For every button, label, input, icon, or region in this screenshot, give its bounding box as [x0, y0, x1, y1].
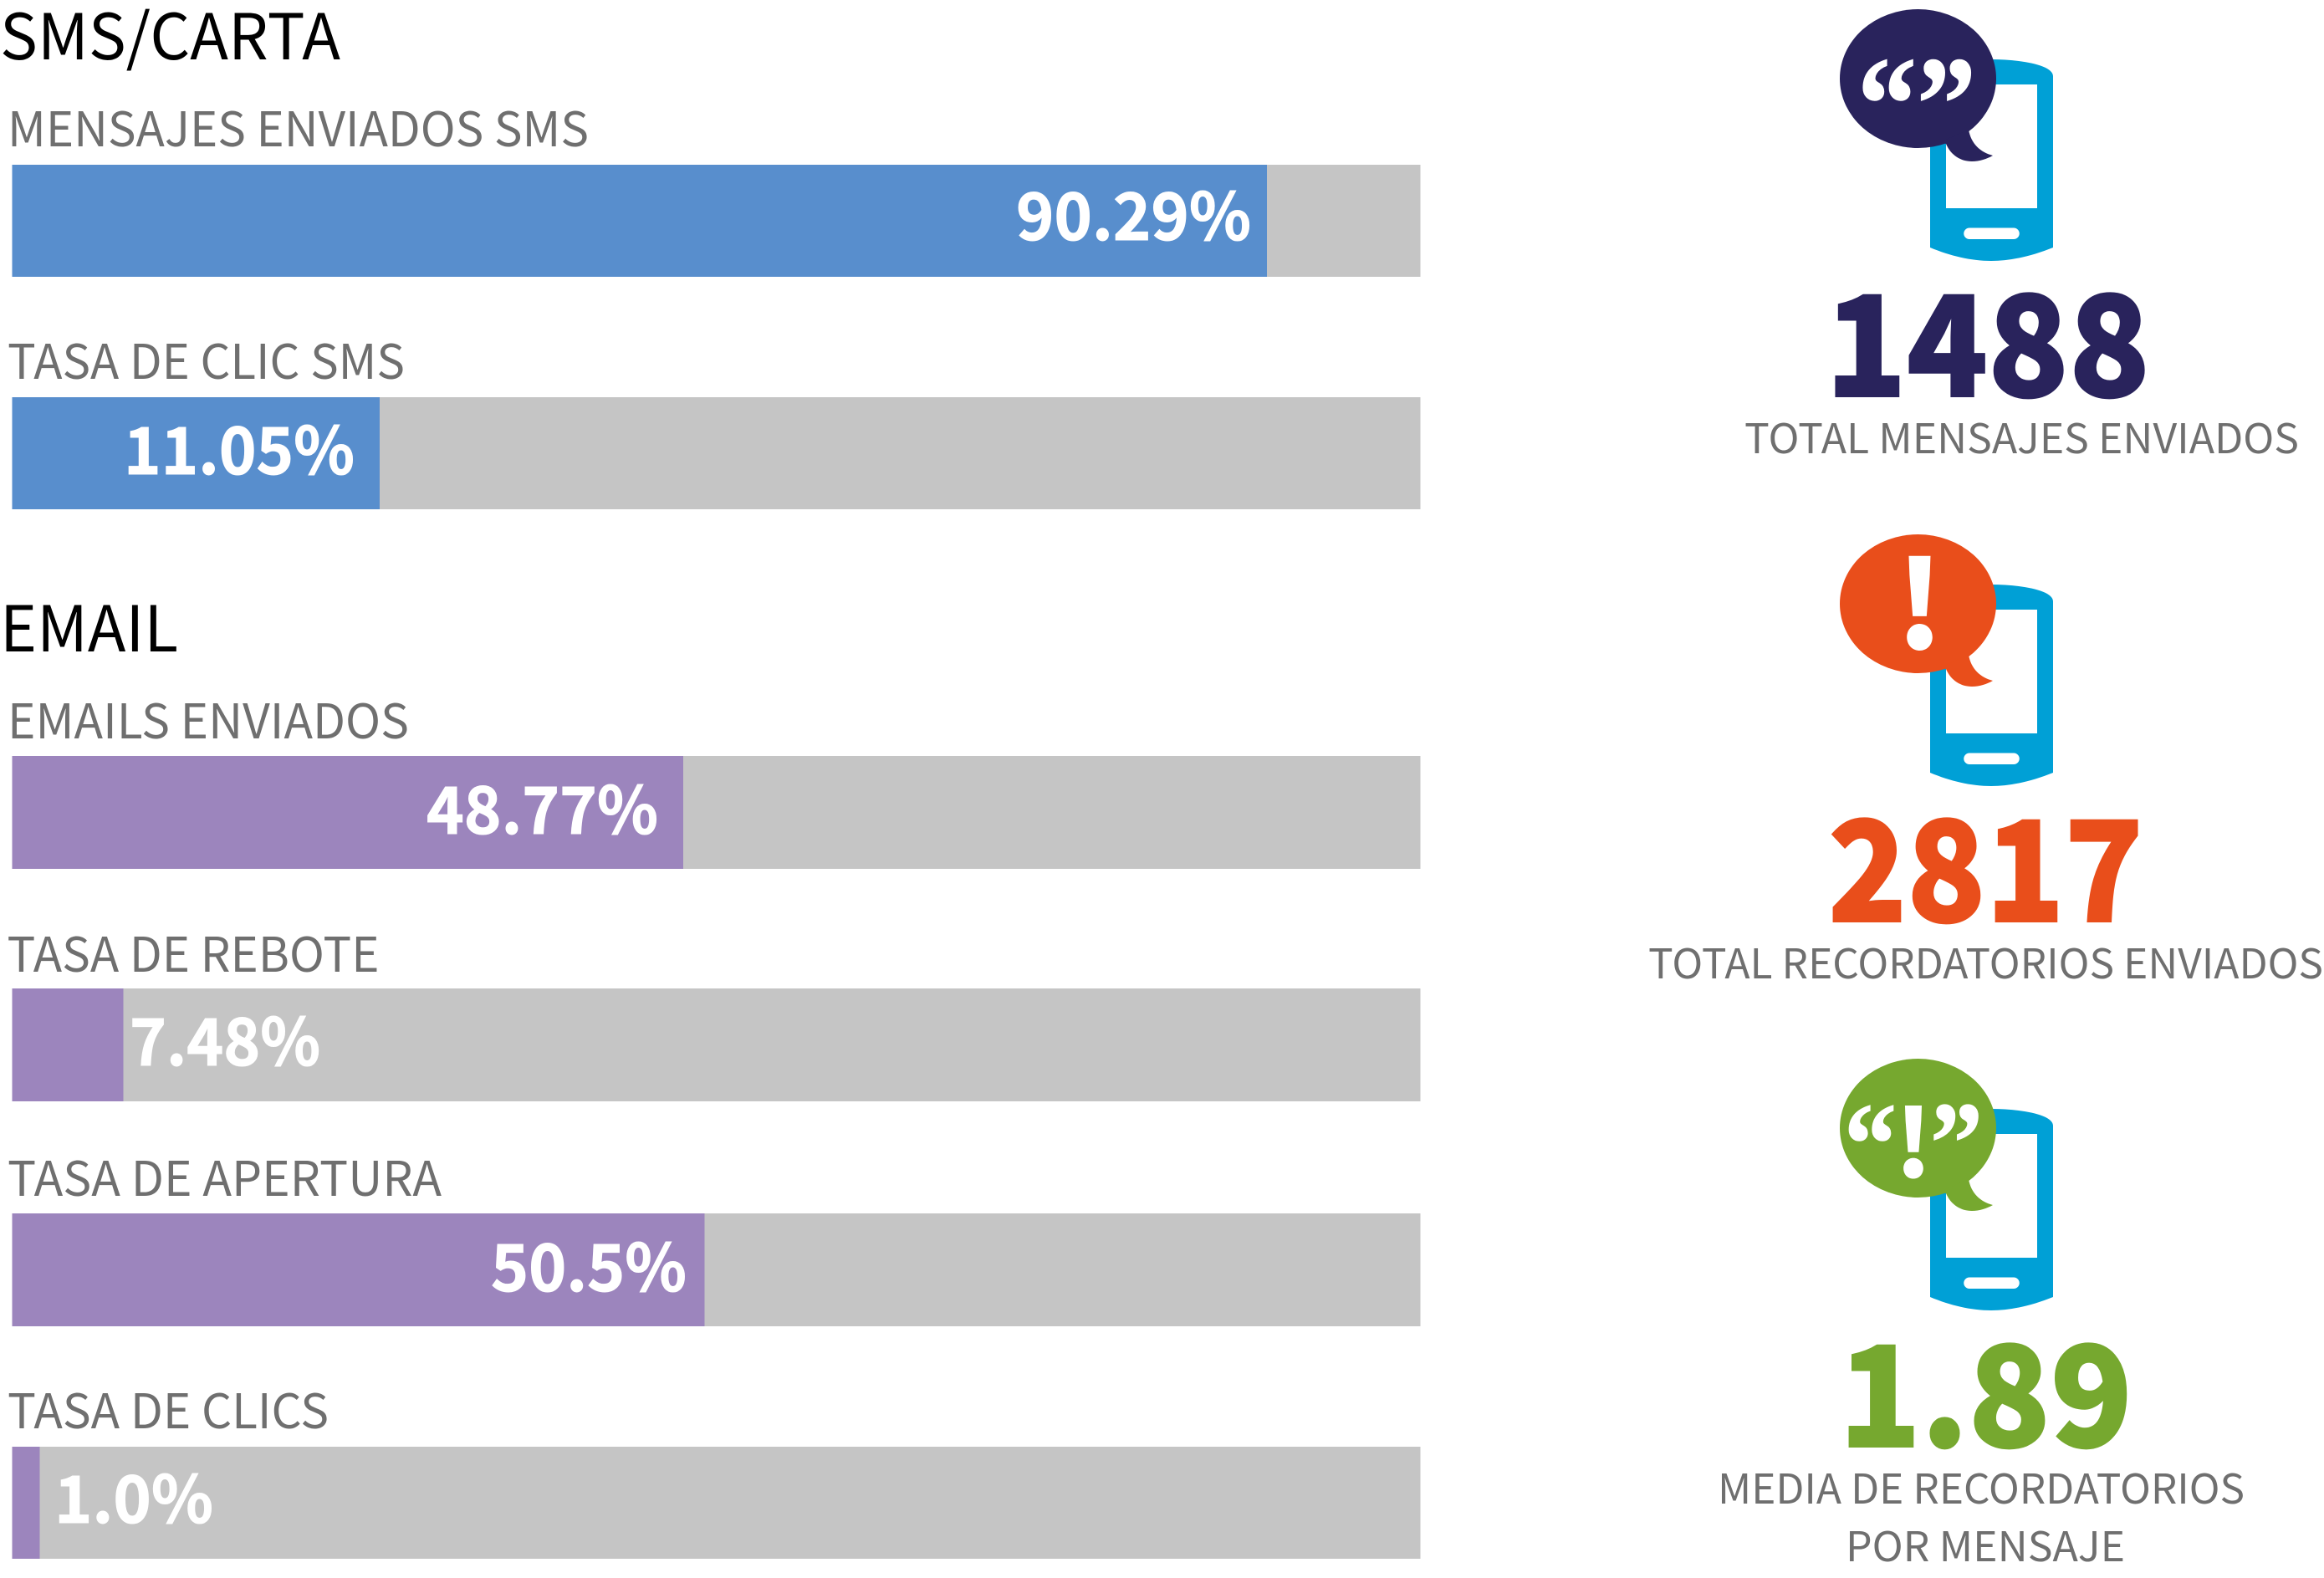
icon: phone with quotes bubble: “” [1857, 30, 1976, 180]
caption: total mensajes enviados: TOTAL MENSAJES ENVIADOS [1744, 406, 2299, 466]
stat: 1.89: 1.89 [1839, 1285, 2132, 1488]
heading: EMAIL: EMAIL [0, 578, 178, 670]
caption: media de recordatorios por mensaje: POR MENSAJE [1846, 1514, 2125, 1574]
bar: emails enviados: 48.77% [426, 759, 658, 853]
icon: phone with quoted exclamation bubble: ” [1930, 1079, 1983, 1208]
bar: mensajes enviados SMS: MENSAJES ENVIADOS SMS [8, 92, 589, 161]
bar: tasa de apertura: TASA DE APERTURA [8, 1141, 442, 1210]
icon: phone with quotes bubble [1840, 9, 2053, 261]
bar: tasa de clic SMS: TASA DE CLIC SMS [8, 324, 405, 393]
bar: mensajes enviados SMS: 90.29% [1016, 166, 1251, 259]
bar: tasa de clics: TASA DE CLICS [8, 1374, 329, 1443]
bar: tasa de rebote: 7.48% [130, 991, 320, 1085]
bar: tasa de apertura [8, 1141, 1420, 1326]
bar: tasa de clics: 1.0% [54, 1448, 213, 1542]
stat: 2817: 2817 [1828, 760, 2143, 963]
bar: tasa de clic SMS: 11.05% [124, 400, 355, 493]
bar: emails enviados [8, 684, 1420, 869]
caption: media de recordatorios por mensaje [1718, 1457, 2245, 1574]
stat: 1488: 1488 [1826, 235, 2150, 437]
icon: phone with exclamation bubble: ! [1896, 508, 1943, 684]
icon: phone with quoted exclamation bubble [1840, 1059, 2053, 1310]
bar: tasa de rebote [7, 917, 1420, 1101]
bar: tasa de clics [8, 1374, 1420, 1559]
caption: total recordatorios enviados: TOTAL RECORDATORIOS ENVIADOS [1648, 932, 2323, 991]
bar: tasa de apertura: 50.5% [491, 1217, 687, 1310]
icon: phone with exclamation bubble [1840, 508, 2053, 786]
bar: mensajes enviados SMS [8, 92, 1420, 277]
bar: tasa de rebote: TASA DE REBOTE [7, 917, 380, 986]
icon: phone with quoted exclamation bubble: “ [1844, 1080, 1897, 1209]
bar: tasa de clic SMS [8, 324, 1420, 509]
bar: emails enviados: EMAILS ENVIADOS [8, 684, 409, 753]
icon: phone with quoted exclamation bubble: ! [1895, 1070, 1932, 1205]
caption: media de recordatorios por mensaje: MEDIA DE RECORDATORIOS [1718, 1457, 2245, 1516]
